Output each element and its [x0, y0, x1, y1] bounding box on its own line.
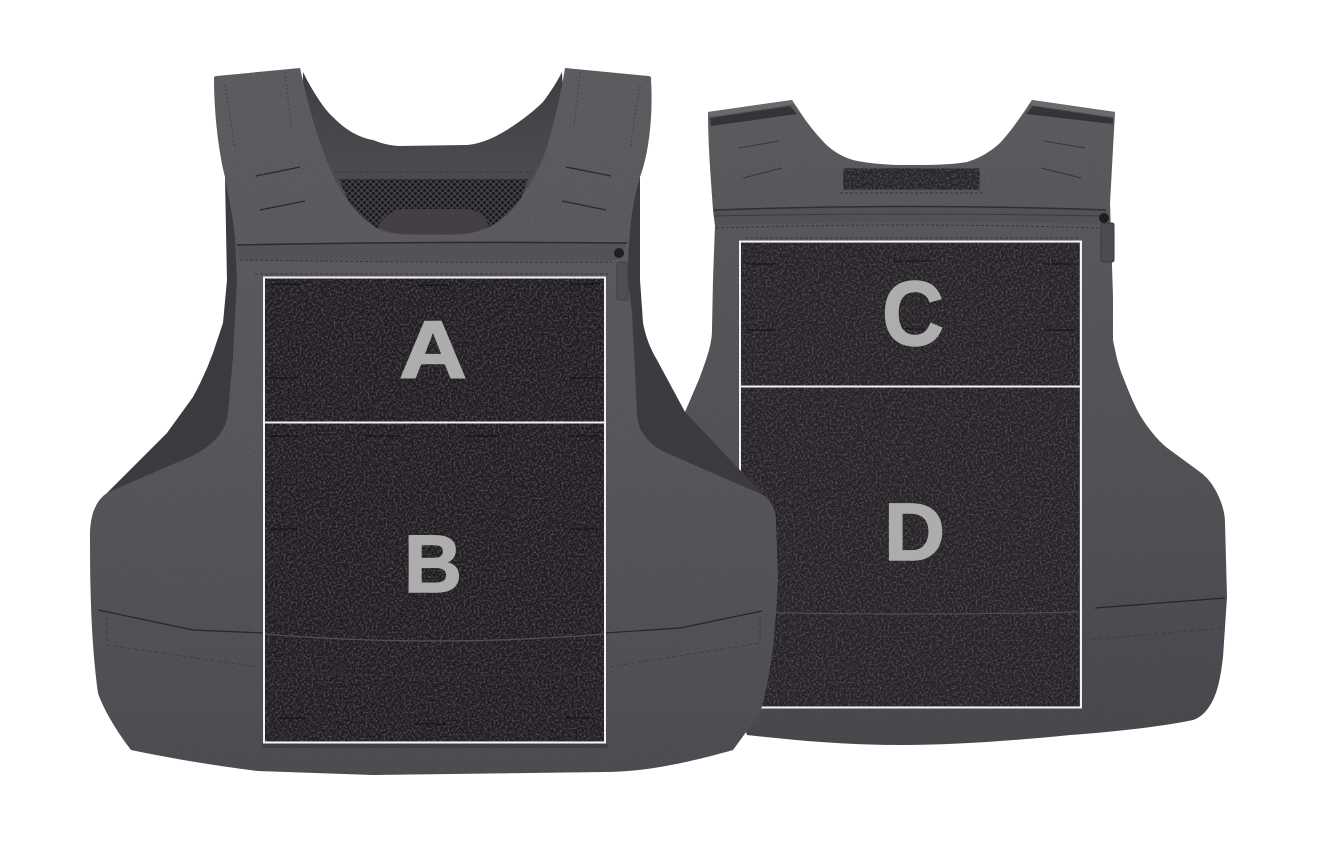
front vest [90, 68, 778, 775]
back zipper [713, 206, 1114, 262]
neck mesh [339, 179, 528, 228]
panel letter B: B [404, 519, 462, 610]
neck pad [378, 209, 488, 234]
panel C outline [740, 242, 1081, 386]
front side lining left [107, 177, 245, 510]
back vest body [660, 100, 1227, 745]
panel A outline [264, 278, 605, 422]
front side lining right [620, 177, 763, 510]
front main fabric [90, 68, 778, 775]
panel D flap line [741, 612, 1079, 614]
inner neck panel [300, 72, 570, 240]
panel A and B seams [270, 284, 600, 724]
back lower flap lines [1095, 598, 1225, 608]
back vest [660, 100, 1227, 745]
back velcro name patch [843, 168, 980, 190]
panel C and D seams [746, 261, 1075, 330]
panel B flap lines [265, 634, 604, 641]
panel letter A: A [399, 305, 467, 396]
front lower flap lines [98, 610, 762, 667]
panels A and B velcro field [265, 278, 604, 741]
back shoulder slots [739, 141, 1085, 178]
neck band stitch [335, 171, 532, 173]
panel letter D: D [884, 487, 945, 578]
back shoulder lips [710, 106, 1113, 126]
panel letter C: C [882, 263, 944, 365]
strap stitching and slots [225, 72, 640, 210]
panel B outline [264, 422, 605, 742]
panel bottom edge shadow [262, 744, 608, 748]
front zipper [237, 242, 628, 300]
panels C and D velcro field [741, 243, 1079, 706]
panel D outline [740, 386, 1081, 708]
